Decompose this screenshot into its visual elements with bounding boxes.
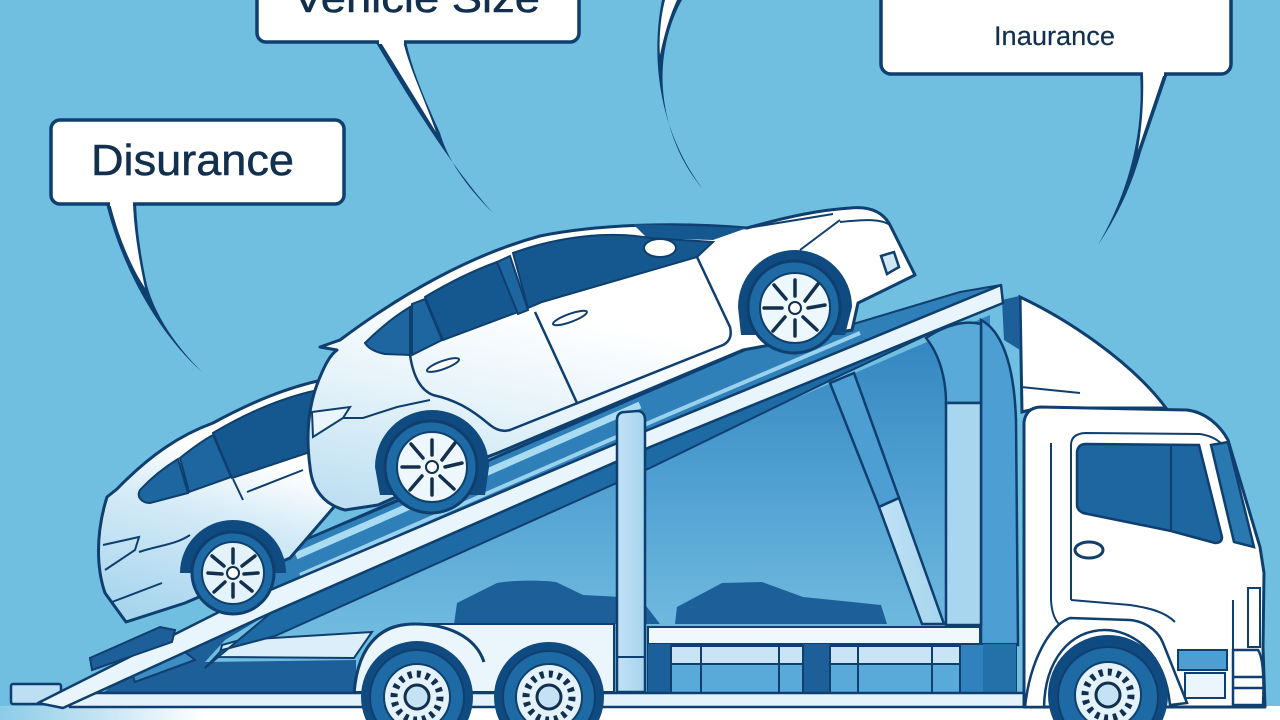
callout: Vehicle Size <box>257 0 579 213</box>
callout: Inaurance <box>881 0 1231 245</box>
back car wheel <box>180 520 286 614</box>
bottom rail <box>70 693 1025 707</box>
front trailer post <box>617 411 645 692</box>
rear wheel 2 <box>494 642 604 720</box>
front car wheel rear <box>375 410 489 513</box>
loading ramp white band <box>38 285 1003 708</box>
cab lower box <box>1185 673 1225 698</box>
truck chassis <box>11 610 1025 707</box>
lower deck <box>648 627 980 644</box>
front car door lines <box>410 257 731 431</box>
cab fender <box>1025 618 1187 707</box>
front car <box>308 208 915 513</box>
cab windshield <box>1211 442 1254 547</box>
truck cab <box>1024 407 1265 707</box>
front car handles <box>552 308 588 328</box>
front car tail light <box>312 407 350 437</box>
front car rear window <box>365 307 410 355</box>
trailer posts <box>830 320 1018 645</box>
cab door outline <box>1051 433 1224 625</box>
cab lower blue strip <box>1178 650 1227 670</box>
left foot plate <box>11 684 61 704</box>
rear wheel 1 <box>354 624 484 720</box>
cab headlight <box>1248 588 1260 647</box>
cab side window <box>1077 444 1222 543</box>
front car front window <box>513 235 713 308</box>
loading ramp upper rails <box>223 285 1001 610</box>
ground strip <box>0 706 1280 720</box>
callout: Disurance <box>51 120 344 372</box>
back car <box>98 380 373 622</box>
main bed side <box>354 624 614 692</box>
callout: Disurance: Disurance <box>91 136 294 185</box>
chassis dark mass <box>104 610 356 692</box>
cab door handle <box>1075 542 1103 558</box>
back car middle window <box>180 435 231 492</box>
front car dark roof strip <box>633 224 747 240</box>
silhouettes of stored cars <box>454 581 887 624</box>
back car front window <box>213 390 318 478</box>
back car rear window <box>139 459 188 503</box>
front truck wheel <box>1048 635 1168 720</box>
front car mirror <box>644 239 676 257</box>
front car wheel front <box>738 250 852 353</box>
dark pad on ramp foot <box>90 627 175 670</box>
front car fog lamp <box>881 252 899 274</box>
upper bed panel <box>219 632 372 658</box>
back car details <box>103 467 373 602</box>
callout tail: cropped speech bubble <box>657 0 702 188</box>
truck trailer interior <box>270 315 990 640</box>
front car small window <box>412 299 442 355</box>
front car pillar <box>497 256 528 314</box>
dark strip under ramp <box>205 300 1001 668</box>
trailer cab wedge <box>1002 296 1166 412</box>
callout: Inaurance: Inaurance <box>994 21 1115 51</box>
front car middle window <box>425 262 518 340</box>
cab bumper <box>1233 650 1263 705</box>
